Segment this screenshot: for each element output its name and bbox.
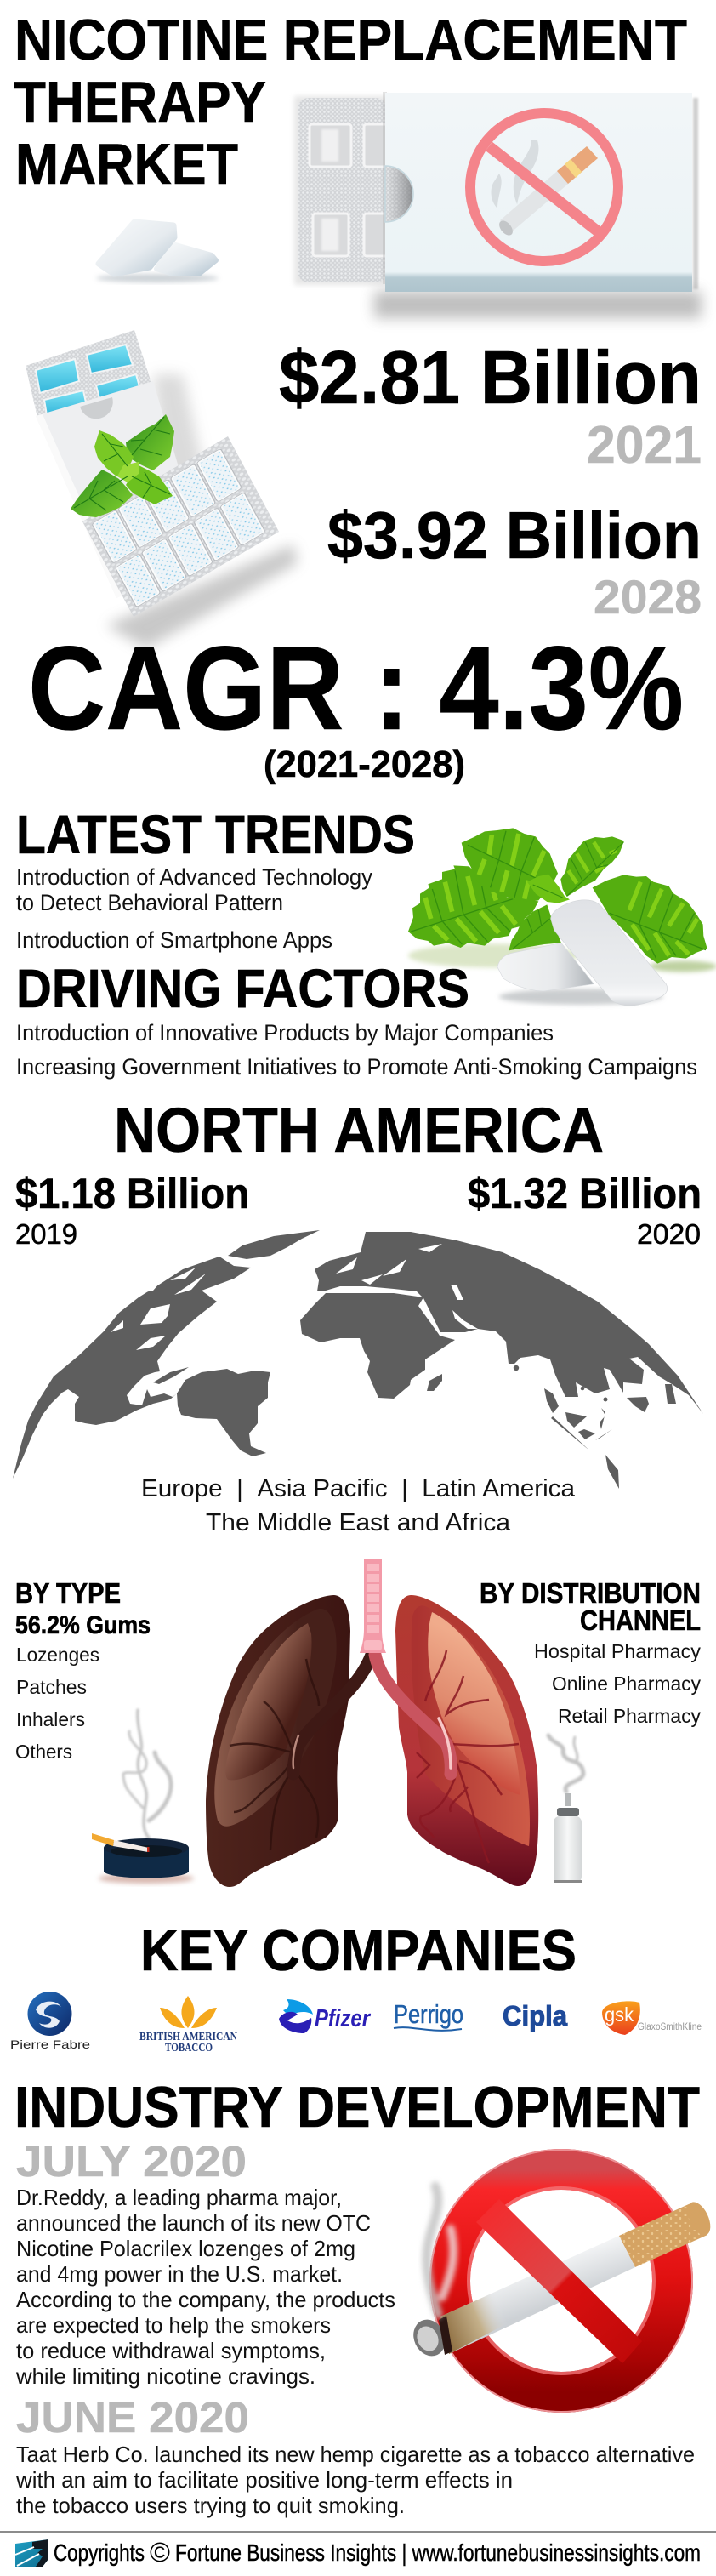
map: seas and ice gaps <box>111 1244 478 1384</box>
logo: gsk <box>602 2001 702 2035</box>
text block: june 2020: the tobacco users trying to quit smoking. <box>16 2493 405 2518</box>
illustration: nicotine pack with no smoking sign <box>294 92 702 318</box>
stat: 2021 value: 2021 <box>587 416 702 475</box>
panel: by distribution channel: Hospital Pharmacy <box>534 1640 701 1662</box>
title: THERAPY <box>14 70 266 134</box>
text block: other regions <box>141 1475 576 1536</box>
logo: british american tobacco: BRITISH AMERICAN <box>139 2031 237 2043</box>
icon: faded no smoking <box>470 113 618 261</box>
stat: 2021 value: $2.81 Billion <box>279 335 702 419</box>
text block: latest trends <box>16 864 372 953</box>
text block: june 2020 <box>15 2393 695 2518</box>
trachea <box>360 1559 386 1653</box>
logo: british american tobacco: TOBACCO <box>165 2042 213 2055</box>
panel: by distribution channel <box>480 1577 701 1727</box>
leaf: right <box>593 875 707 964</box>
text block: july 2020: while limiting nicotine cravings. <box>15 2363 315 2389</box>
logo: gsk: gsk <box>605 2003 634 2026</box>
illustration: vaping device with vapor <box>548 1735 583 1883</box>
panel: by distribution channel: Online Pharmacy <box>552 1673 701 1695</box>
logo: gsk: GlaxoSmithKline <box>638 2020 702 2032</box>
text block: july 2020: to reduce withdrawal symptoms, <box>16 2338 326 2363</box>
leaf: lower centre <box>509 875 570 950</box>
stat: 2021 value <box>279 335 702 475</box>
lung: smoker <box>206 1595 350 1887</box>
leaf: upper left <box>462 828 558 902</box>
text block: july 2020: are expected to help the smokers <box>16 2312 331 2338</box>
illustration: gum blister pack with mint <box>26 330 298 648</box>
stat: north america 2020: 2020 <box>637 1218 701 1250</box>
panel: by type: BY TYPE <box>15 1577 121 1609</box>
map: north america <box>13 1257 251 1479</box>
text block: driving factors: Introduction of Innovative Products by Major Companies <box>16 1020 554 1046</box>
text block: june 2020: Taat Herb Co. launched its new hemp cigarette as a tobacco alternative <box>16 2442 695 2467</box>
panel: by type: Patches <box>16 1676 87 1698</box>
text block: latest trends: to Detect Behavioral Pattern <box>16 890 283 915</box>
title <box>14 8 687 197</box>
logo: pfizer <box>279 1999 371 2033</box>
text block: july 2020: announced the launch of its new OTC <box>16 2210 371 2236</box>
text block: july 2020: Nicotine Polacrilex lozenges of 2mg <box>16 2236 355 2261</box>
logo: perrigo: Perrigo <box>394 1999 463 2029</box>
text block: july 2020: Dr.Reddy, a leading pharma major, <box>16 2185 342 2210</box>
text block: june 2020: with an aim to facilitate positive long-term effects in <box>15 2467 513 2493</box>
illustration: ashtray with smoke <box>92 1710 194 1884</box>
stat: 2028 value <box>327 498 702 624</box>
map: eurasia <box>315 1232 703 1414</box>
stat: north america 2019: 2019 <box>15 1218 77 1250</box>
gum: flat piece <box>497 943 594 991</box>
heading: driving factors: DRIVING FACTORS <box>16 958 469 1019</box>
stat: 2028 value: 2028 <box>594 570 702 624</box>
heading: key companies: KEY COMPANIES <box>140 1918 577 1983</box>
heading: north america: NORTH AMERICA <box>114 1095 604 1165</box>
gum: tilted piece <box>551 900 668 1006</box>
leaf: top right <box>560 836 624 897</box>
footer <box>15 2537 701 2567</box>
world map <box>13 1230 703 1489</box>
map: greenland <box>228 1230 320 1259</box>
text block: july 2020 <box>15 2137 395 2389</box>
panel: by distribution channel: CHANNEL <box>580 1604 701 1636</box>
panel: by type: Inhalers <box>16 1708 85 1730</box>
stat: north america 2019 <box>15 1170 249 1250</box>
panel: by type <box>15 1577 151 1763</box>
text block: latest trends: Introduction of Advanced Technology <box>16 864 372 890</box>
title: MARKET <box>15 132 238 197</box>
white gum blister <box>82 436 279 617</box>
stat: north america 2020 <box>468 1170 702 1250</box>
cigarette <box>407 2198 715 2362</box>
illustration: lungs <box>206 1559 538 1887</box>
bronchi <box>293 1655 451 1774</box>
leaf: far left <box>408 865 538 948</box>
stat: north america 2020: $1.32 Billion <box>468 1170 702 1217</box>
panel: by type: Others <box>15 1741 72 1763</box>
logo: british american tobacco <box>139 1996 237 2055</box>
footer: Copyrights <box>54 2539 145 2566</box>
text block: other regions: Europe | Asia Pacific | Latin America <box>141 1475 576 1502</box>
text block: latest trends: Introduction of Smartphone Apps <box>16 927 332 953</box>
logo: cipla: Cipla <box>503 2000 568 2032</box>
text block: other regions: The Middle East and Africa <box>206 1509 511 1536</box>
logo: pfizer: Pfizer <box>315 2005 371 2032</box>
map: madagascar <box>427 1374 442 1391</box>
lung: healthy <box>395 1595 538 1886</box>
stat: CAGR: (2021-2028) <box>264 744 465 785</box>
stat: 2028 value: $3.92 Billion <box>327 498 702 573</box>
text block: july 2020: and 4mg power in the U.S. market. <box>16 2261 343 2287</box>
map: south america <box>177 1369 270 1456</box>
illustration: mint leaves and gum <box>408 828 716 1006</box>
icon: gum pieces <box>96 222 219 282</box>
panel: by type: 56.2% Gums <box>15 1611 151 1639</box>
logo: pierre fabre: Pierre Fabre <box>10 2037 90 2051</box>
icon: mint sprig <box>71 414 174 517</box>
panel: by distribution channel: Retail Pharmacy <box>558 1705 701 1727</box>
stat: north america 2019: $1.18 Billion <box>15 1170 249 1217</box>
prohibition bar <box>476 2199 642 2363</box>
smoke <box>427 2186 453 2314</box>
text block: july 2020: JULY 2020 <box>16 2137 247 2186</box>
blue gum blister <box>26 330 151 421</box>
footer: © <box>150 2537 170 2567</box>
logo: pierre fabre <box>10 1992 90 2051</box>
illustration: no smoking sign with cigarette <box>407 2150 715 2412</box>
logo: fortune business insights <box>15 2539 48 2567</box>
panel: by type: Lozenges <box>16 1644 99 1666</box>
map: east asia islands <box>544 1384 676 1489</box>
text block: june 2020: JUNE 2020 <box>16 2393 249 2442</box>
text block: driving factors <box>16 1020 697 1080</box>
heading: latest trends: LATEST TRENDS <box>16 804 415 865</box>
map: africa <box>300 1293 455 1399</box>
text block: july 2020: According to the company, the products <box>16 2287 395 2312</box>
